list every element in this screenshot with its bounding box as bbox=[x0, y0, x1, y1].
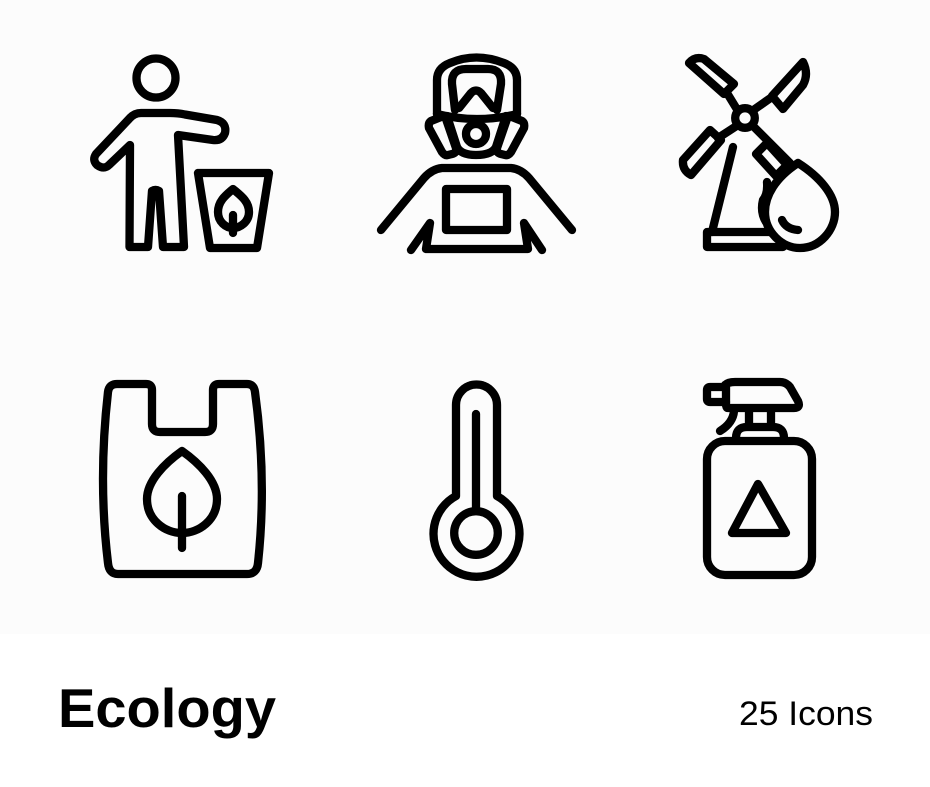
icon: spray bottle bbox=[707, 382, 812, 575]
title: Ecology bbox=[58, 677, 276, 739]
icon count label: 25 Icons bbox=[739, 695, 873, 733]
icon: plastic bag with leaf bbox=[103, 384, 262, 574]
icon: person in gas mask bbox=[381, 58, 572, 250]
icon: thermometer bbox=[434, 384, 520, 577]
icon: windmill with water drop bbox=[683, 58, 835, 248]
icon: person throwing trash into bin bbox=[94, 58, 269, 248]
